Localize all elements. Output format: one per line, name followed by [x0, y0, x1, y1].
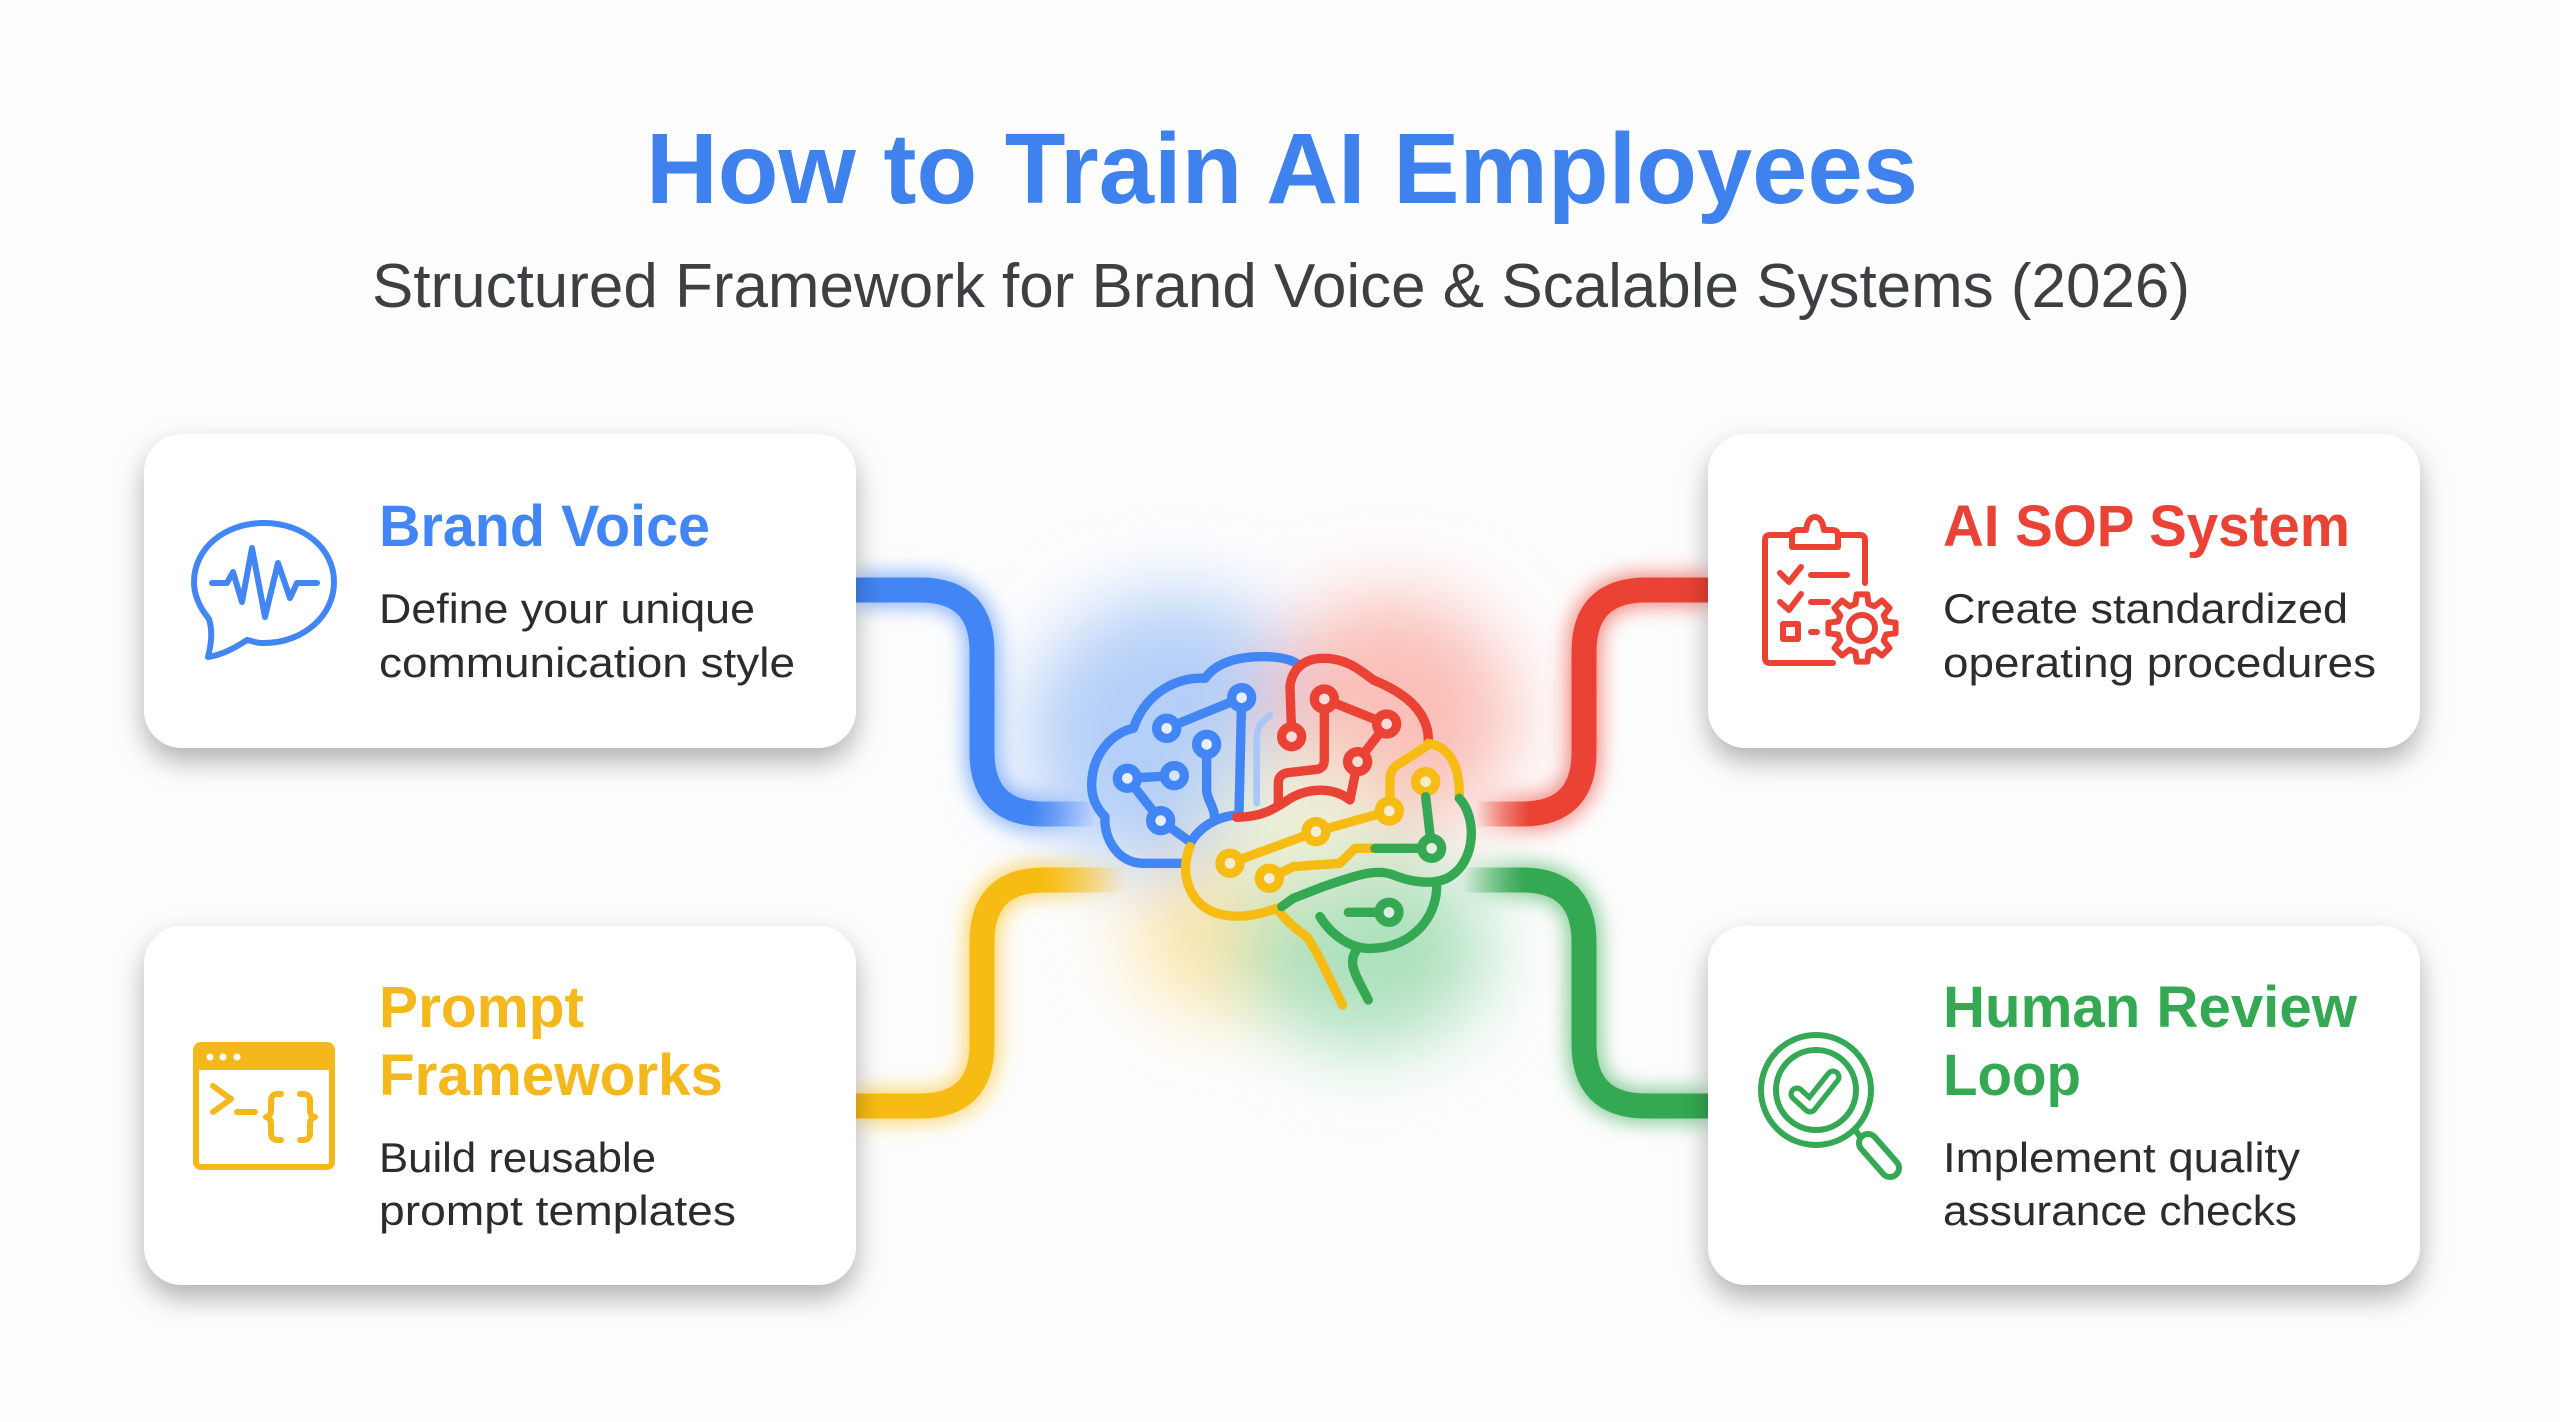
description: prompt frameworks	[379, 1134, 736, 1234]
panel: human review loop	[1708, 926, 2420, 1285]
description: prompt frameworks: prompt templates	[379, 1187, 736, 1234]
heading: prompt frameworks: Frameworks	[379, 1043, 723, 1108]
panel: AI SOP system	[1708, 434, 2420, 748]
title: How to Train AI Employees	[646, 113, 1918, 225]
card: human review loop	[1708, 926, 2420, 1285]
icon: speech bubble with waveform	[194, 523, 334, 657]
connector: AI SOP system to brain	[1475, 590, 1709, 814]
heading: prompt frameworks	[379, 975, 723, 1108]
connector: brand voice to brain	[856, 590, 1095, 814]
brain glow	[1025, 595, 1515, 1050]
brain: green lobe	[1282, 797, 1471, 1000]
panel: prompt frameworks	[144, 926, 856, 1285]
card: AI SOP system	[1708, 434, 2420, 748]
panel: brand voice	[144, 434, 856, 748]
brain icon	[1092, 657, 1471, 1005]
heading: human review loop: Loop	[1943, 1043, 2081, 1108]
card: prompt frameworks	[144, 926, 856, 1285]
heading: brand voice: Brand Voice	[379, 494, 710, 559]
description: AI SOP system: operating procedures	[1943, 639, 2376, 686]
heading: AI SOP system: AI SOP System	[1943, 494, 2350, 559]
brain: blue lobe	[1092, 657, 1297, 863]
heading: human review loop	[1943, 975, 2358, 1108]
description: human review loop: Implement quality	[1943, 1134, 2300, 1181]
icon: clipboard with gear	[1765, 517, 1896, 663]
card: brand voice	[144, 434, 856, 748]
description: human review loop: assurance checks	[1943, 1187, 2297, 1234]
description: brand voice	[379, 585, 795, 686]
brain: red lobe	[1237, 658, 1428, 817]
description: AI SOP system: Create standardized	[1943, 585, 2348, 632]
description: brand voice: Define your unique	[379, 585, 755, 632]
icon: terminal window	[194, 1044, 334, 1167]
brain: yellow lobe	[1186, 743, 1459, 1005]
heading: prompt frameworks: Prompt	[379, 975, 584, 1040]
connector: human review loop to brain	[1462, 880, 1709, 1106]
connector glows	[856, 590, 1709, 1106]
icon: magnifier with check	[1761, 1035, 1890, 1168]
description: human review loop	[1943, 1134, 2300, 1234]
description: brand voice: communication style	[379, 639, 795, 686]
description: AI SOP system	[1943, 585, 2376, 686]
description: prompt frameworks: Build reusable	[379, 1134, 656, 1181]
heading: human review loop: Human Review	[1943, 975, 2358, 1040]
subtitle: Structured Framework for Brand Voice & Scalable Systems (2026)	[372, 252, 2190, 321]
connector: prompt frameworks to brain	[856, 880, 1125, 1106]
